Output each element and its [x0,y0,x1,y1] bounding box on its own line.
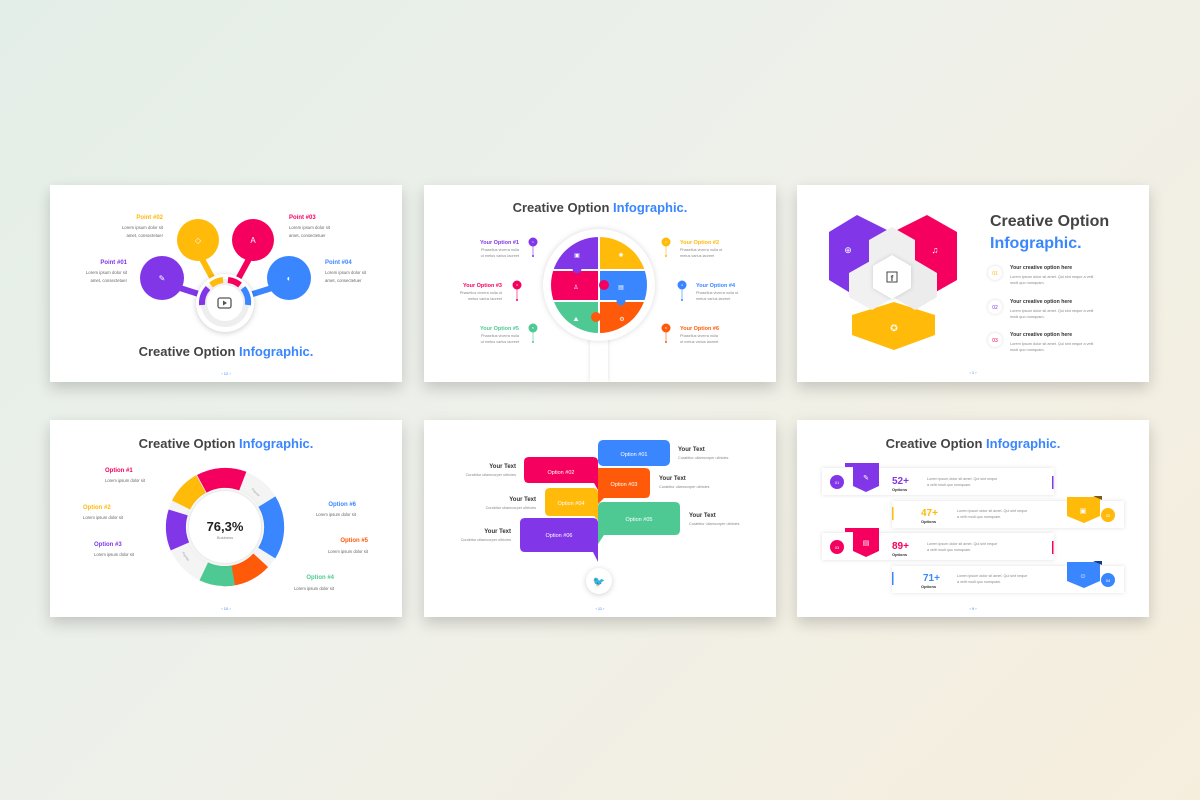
labels: Lorem ipsum dolor sit [122,225,164,230]
pins: 4 [681,283,683,287]
circle: point 04 [267,256,311,300]
row 3 [822,528,1054,560]
twitter icon: 🐦 [593,577,605,588]
list: Your creative option here [1010,332,1072,338]
circle: point 03: A [250,236,256,245]
text labels: Your Text [659,476,686,482]
labels: Point #02 [136,215,164,221]
list: Lorem ipsum dolor sit amet. Qui sint neque a velit [1010,275,1094,279]
row 1: a velit modi quo numquam. [927,483,971,487]
row 4: 71+ [923,573,940,584]
option labels: Phasellus viverra nulla [680,334,719,338]
text labels: Curabitur ullamcorper ultricies [466,473,516,477]
bubbles: Option #03 [611,482,637,488]
list [988,265,1094,352]
row 2 [892,496,1124,528]
bubbles: Option #04 [558,501,584,507]
bubbles: Option #05 [626,517,652,523]
pins: 3 [516,283,518,287]
list: Your creative option here [1010,299,1072,305]
magnifier: ⚙ [619,316,625,323]
labels: Lorem ipsum dolor sit [325,270,367,275]
bubbles: Option #01 [621,452,647,458]
magnifier: ♙ [573,284,579,291]
text labels: Curabitur ullamcorper ultricies [486,506,536,510]
option labels: Lorem ipsum dolor sit [94,552,135,557]
row 2: 02 [1106,513,1111,518]
option labels: Phasellus viverra nulla ut [460,291,503,295]
circle: point 04: ◐ [287,274,292,283]
row 3: 03 [835,545,840,550]
list: Lorem ipsum dolor sit amet. Qui sint neque a velit [1010,342,1094,346]
slide 4: donut [50,420,402,617]
pins: 2 [665,240,667,244]
title: Creative Option Infographic. [139,436,313,451]
slide 4: donut: ‹ 10 › [221,606,231,611]
row 1: ✎ [863,475,869,482]
list: modi quo numquam. [1010,281,1045,285]
option labels: Option #1 [105,468,133,474]
option labels: Lorem ipsum dolor sit [83,515,124,520]
donut chart: 76,3% [207,519,244,534]
row 3: a velit modi quo numquam. [927,548,971,552]
row 1: 01 [835,480,840,485]
option labels: Option #5 [340,538,369,544]
list: 01 [992,271,998,277]
pins: 1 [532,240,534,244]
labels: Point #03 [289,215,316,221]
slide 2: puzzle [424,185,776,382]
row 3: Lorem ipsum dolor sit amet. Qui sint neque [927,542,997,546]
labels: amet, consectetuer [289,233,326,238]
option labels: ut metus varius laoreet [481,254,520,258]
donut chart: Popular [251,487,261,497]
circle: point 01: ✎ [159,274,165,283]
title: Creative Option Infographic. [513,200,687,215]
title: Infographic. [990,235,1082,252]
row 2: Options [921,519,937,524]
labels [86,215,367,283]
title: Creative Option [990,213,1109,230]
magnifier: ⛰ [573,316,579,323]
text labels: Your Text [489,464,516,470]
hexagon cluster [829,215,957,350]
option labels: Option #6 [328,502,357,508]
row 1 [822,463,1054,495]
donut chart: Business [217,535,233,540]
option labels: Your Option #4 [696,283,736,289]
row 2: Lorem ipsum dolor sit amet. Qui sint neque [957,509,1027,513]
bubbles: Option #06 [546,533,572,539]
row 1: Lorem ipsum dolor sit amet. Qui sint neque [927,477,997,481]
row 1: 52+ [892,476,909,487]
twitter icon [586,568,612,594]
option labels: metus varius laoreet [696,297,731,301]
row 2: ▣ [1080,508,1086,515]
hexagon cluster: ♫ [932,245,938,255]
title: Creative Option Infographic. [886,436,1060,451]
donut chart [175,475,278,581]
row 3: 89+ [892,541,909,552]
circle: point 03 [232,219,274,261]
option labels [83,468,369,591]
option labels: Phasellus viverra nulla ut [680,248,723,252]
pins [512,238,686,343]
slide 6: ribbons stats: ‹ 9 › [969,606,977,611]
slide 5: speech bubbles: ‹ 11 › [595,606,605,611]
slide 3: hexagons: ‹ 1 › [969,370,977,375]
option labels: Your Option #2 [680,240,719,246]
magnifier: ▣ [574,253,580,259]
labels: amet, consectetuer [325,278,362,283]
magnifier: ✺ [618,252,624,259]
row 3: ▤ [863,540,869,547]
title [990,213,1109,252]
row 1: Options [892,487,908,492]
labels: Point #04 [325,260,352,266]
labels: Point #01 [100,260,128,266]
option labels: ut metus varius laoreet [680,340,719,344]
option labels: ut metus varius laoreet [481,340,520,344]
list: 03 [992,338,998,344]
donut chart: Popular [181,551,190,562]
option labels: Option #4 [306,575,335,581]
list: modi quo numquam. [1010,348,1045,352]
title: Creative Option Infographic. [139,344,313,359]
row 2: 47+ [921,508,938,519]
bubbles: Option #02 [548,470,574,476]
labels: Lorem ipsum dolor sit [86,270,128,275]
text labels: Your Text [678,447,705,453]
hexagon cluster: ⊕ [844,245,852,255]
slide 3: hexagons [797,185,1149,382]
row 4: a velit modi quo numquam. [957,580,1001,584]
option labels: Your Option #5 [480,326,519,332]
row 4: Lorem ipsum dolor sit amet. Qui sint neque [957,574,1027,578]
option labels: Lorem ipsum dolor sit [294,586,335,591]
list: Your creative option here [1010,265,1072,271]
text labels: Curabitur ullamcorper ultricies [678,456,729,460]
row 2: a velit modi quo numquam. [957,515,1001,519]
option labels: Lorem ipsum dolor sit [105,478,146,483]
slide 5: speech bubbles [424,420,776,617]
circle: point 02 [177,219,219,261]
hexagon cluster: f [891,274,894,283]
list: Lorem ipsum dolor sit amet. Qui sint neque a velit [1010,309,1094,313]
option labels: Your Option #6 [680,326,719,332]
text labels: Curabitur ullamcorper ultricies [689,522,740,526]
option labels: metus varius laoreet [468,297,503,301]
option labels: Your Option #3 [463,283,502,289]
text labels: Your Text [509,497,536,503]
labels: amet, consectetuer [126,233,164,238]
option labels: Lorem ipsum dolor sit [316,512,357,517]
hub [196,274,254,332]
list: 02 [992,305,998,311]
option labels: Phasellus viverra nulla ut [696,291,739,295]
hexagon cluster: ✪ [890,323,898,333]
text labels: Your Text [689,513,716,519]
text labels [461,447,740,542]
option labels: metus varius laoreet [680,254,715,258]
connectors [180,259,272,297]
row 4 [892,561,1124,593]
labels: Lorem ipsum dolor sit [289,225,331,230]
slide 1: points infographic: ‹ 12 › [221,371,231,376]
row 4: ☺ [1079,573,1087,580]
text labels: Curabitur ullamcorper ultricies [461,538,511,542]
option labels: Phasellus viverra nulla [481,334,520,338]
pins: 5 [532,326,534,330]
option labels: Lorem ipsum dolor sit [328,549,369,554]
slide 1: points infographic [50,185,402,382]
pins: 6 [665,326,667,330]
magnifier [543,229,655,382]
slide 6: ribbons stats [797,420,1149,617]
option labels [460,240,739,344]
labels: amet, consectetuer [90,278,128,283]
list: modi quo numquam. [1010,315,1045,319]
bubbles [520,440,680,562]
option labels: Phasellus viverra nulla [481,248,520,252]
text labels: Your Text [484,529,511,535]
option labels: Your Option #1 [480,240,519,246]
option labels: Option #3 [94,542,122,548]
circle: point 01 [140,256,184,300]
text labels: Curabitur ullamcorper ultricies [659,485,710,489]
row 4: Options [921,584,937,589]
option labels: Option #2 [83,505,111,511]
row 4: 04 [1106,578,1111,583]
circle: point 02: ◇ [195,236,202,245]
row 3: Options [892,552,908,557]
magnifier: ▤ [618,285,624,291]
